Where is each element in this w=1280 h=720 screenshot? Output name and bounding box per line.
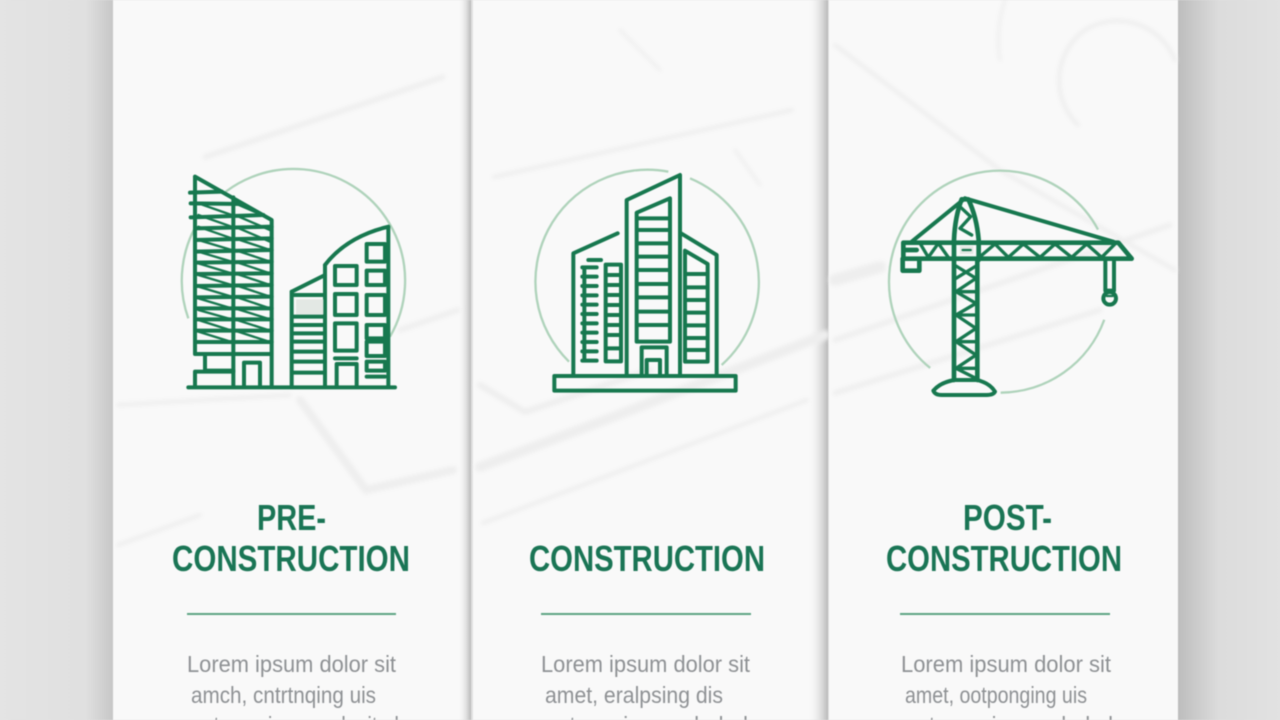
central tower	[627, 175, 680, 375]
blueprint background: left panel	[118, 77, 458, 545]
body text: post-construction: Lorem ipsum dolor sit	[901, 651, 1111, 677]
body text: construction	[541, 651, 750, 720]
heading: post-construction: POST-	[963, 497, 1052, 538]
icon: tower crane	[889, 171, 1132, 395]
blueprint background: right panel	[835, 0, 1175, 393]
mast	[954, 199, 979, 380]
panel: construction	[473, 0, 828, 720]
plinth	[554, 376, 736, 391]
crane base	[933, 380, 995, 395]
right tower	[292, 227, 388, 387]
body text: pre-construction	[187, 651, 399, 720]
heading: construction: CONSTRUCTION	[529, 538, 765, 579]
body text: post-construction: amet, ootponging uis	[905, 682, 1087, 708]
divider	[900, 613, 1110, 615]
right block	[681, 233, 717, 375]
left block	[573, 233, 621, 375]
body text: pre-construction: amch, cntrtnqing uis	[191, 682, 376, 708]
divider	[541, 613, 751, 615]
body text: pre-construction: Lorem ipsum dolor sit	[187, 651, 396, 677]
blueprint background: centre panel	[480, 30, 825, 523]
body text: post-construction	[901, 651, 1113, 720]
heading: post-construction	[886, 497, 1122, 579]
panel: post-construction	[829, 0, 1178, 720]
jib and counterweight	[903, 243, 1132, 271]
heading: pre-construction: CONSTRUCTION	[172, 538, 410, 579]
left tower	[190, 177, 272, 387]
heading: pre-construction	[172, 497, 410, 579]
divider	[187, 613, 396, 615]
body text: construction: Lorem ipsum dolor sit	[541, 651, 750, 677]
icon: twin office towers	[182, 169, 405, 387]
panel: pre-construction	[113, 0, 471, 720]
heading: post-construction: CONSTRUCTION	[886, 538, 1122, 579]
ground line	[188, 381, 395, 393]
tie lines	[912, 198, 1113, 242]
heading: pre-construction: PRE-	[257, 497, 326, 538]
body text: construction: amet, eralpsing dis	[545, 682, 723, 708]
icon: office building	[535, 170, 759, 391]
hook	[1103, 262, 1116, 305]
